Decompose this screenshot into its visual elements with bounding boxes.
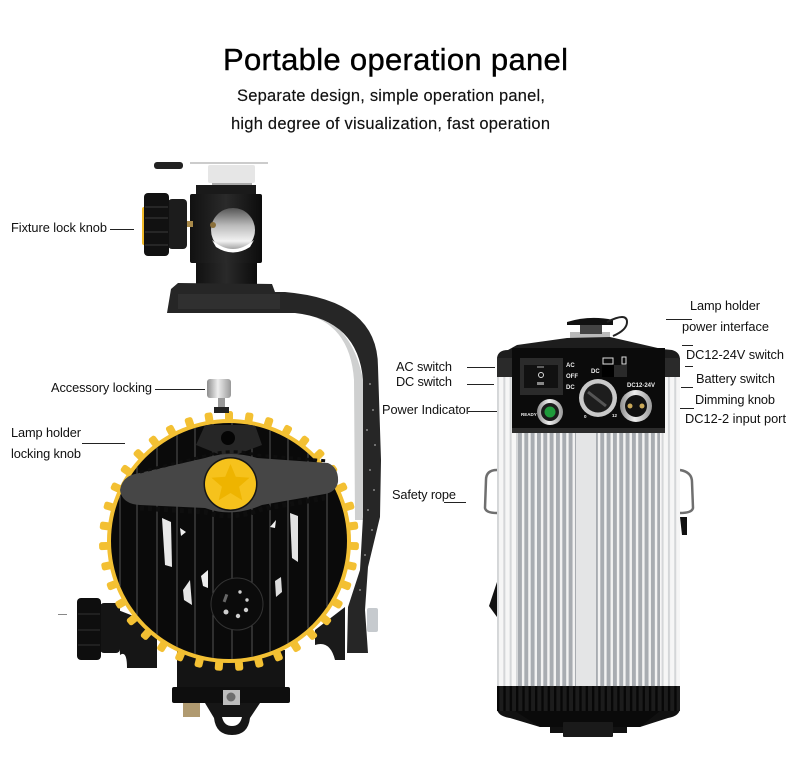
- side handles: [485, 470, 693, 617]
- lamp side knob: [77, 598, 120, 660]
- power indicator: [521, 399, 563, 425]
- label: lamp holder power interface: power interface: [682, 319, 769, 334]
- yellow toothed ring: [99, 411, 359, 671]
- dimming knob: 12: [612, 413, 618, 418]
- label: power indicator: Power Indicator: [382, 402, 471, 417]
- lamp connector: [211, 578, 263, 630]
- AC DC rocker switch: AC: [566, 363, 575, 369]
- label: battery switch: [685, 366, 775, 386]
- lower body of lamp head: [118, 607, 345, 735]
- label: accessory locking: Accessory locking: [51, 380, 152, 395]
- fixture lock knob: [142, 193, 187, 256]
- AC DC rocker switch: OFF: [566, 374, 578, 380]
- dimming knob: [579, 379, 618, 419]
- heat sink with fins: [111, 423, 347, 659]
- top cable connector: [567, 317, 627, 340]
- ball head mount: [154, 162, 268, 290]
- AC DC rocker switch: [520, 358, 578, 395]
- AC DC rocker switch: DC: [566, 385, 575, 391]
- power indicator: READY: [521, 412, 537, 417]
- top cap: [497, 337, 680, 377]
- label: DC12-24V switch: DC12-24V switch: [686, 347, 784, 362]
- subtitle: Separate design, simple operation panel,: [237, 87, 545, 105]
- label: safety rope: Safety rope: [392, 487, 456, 502]
- lamp holder locking handle: [120, 452, 338, 516]
- label: lamp holder locking knob: Lamp holder: [11, 425, 82, 440]
- label: DC switch: [396, 374, 494, 389]
- bottom cap: [497, 686, 680, 737]
- label: DC switch: DC switch: [396, 374, 452, 389]
- C bracket: [167, 283, 381, 653]
- subtitle: [231, 87, 550, 133]
- label: stray leader tick: [58, 614, 67, 616]
- label: DC12-2 input port: DC12-2 input port: [685, 411, 786, 426]
- label: battery switch: Battery switch: [696, 371, 775, 386]
- label: lamp holder locking knob: locking knob: [11, 446, 81, 461]
- DC input port: DC12-24V: [627, 383, 655, 389]
- aluminium body: [497, 370, 680, 686]
- subtitle: high degree of visualization, fast operation: [231, 115, 550, 133]
- label: fixture lock knob: Fixture lock knob: [11, 220, 107, 235]
- label: lamp holder power interface: Lamp holder: [690, 298, 761, 313]
- title: Portable operation panel: [223, 42, 568, 77]
- label: AC switch: [396, 359, 495, 374]
- DC battery switch: DC: [591, 369, 600, 375]
- label: lamp holder power interface: [666, 298, 769, 334]
- black control panel: [512, 348, 665, 433]
- label: dimming knob: Dimming knob: [695, 392, 775, 407]
- DC input port: [620, 383, 655, 422]
- dimming knob: 0: [584, 414, 587, 419]
- label: dimming knob: [681, 388, 775, 407]
- accessory locking screw: [207, 379, 231, 413]
- label: lamp holder locking knob: [11, 425, 125, 461]
- product photo: control box: [485, 317, 693, 737]
- DC battery switch: [591, 357, 627, 377]
- label: AC switch: AC switch: [396, 359, 452, 374]
- product photo: lamp head and bracket: [77, 162, 381, 735]
